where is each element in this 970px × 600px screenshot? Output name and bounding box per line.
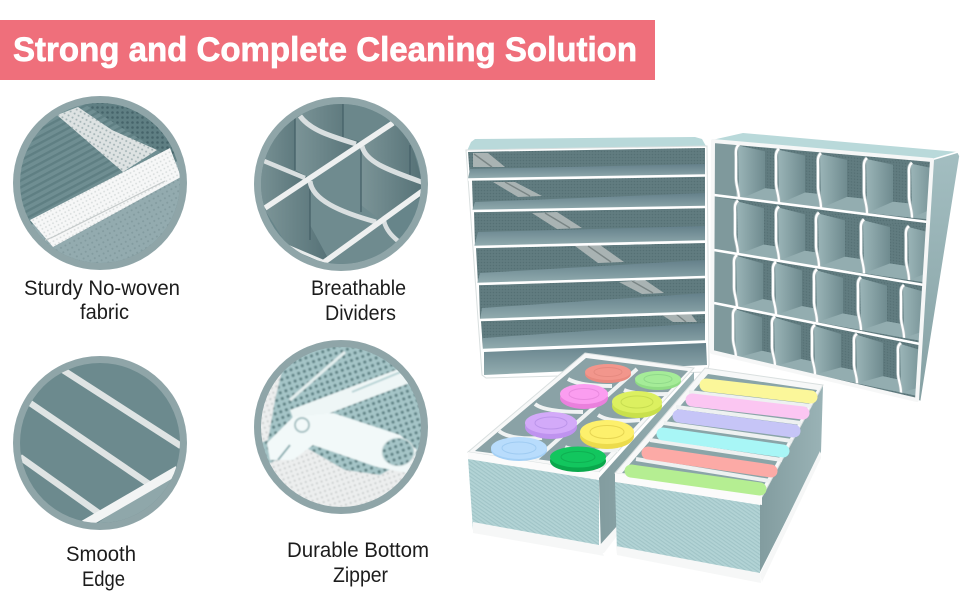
caption: zipper: Zipper xyxy=(333,564,388,587)
organizer: open panel with long shelves xyxy=(466,137,709,378)
row 1 cells xyxy=(712,142,938,220)
title banner xyxy=(0,20,655,80)
sock: lime xyxy=(612,391,662,418)
detail circle: breathable dividers xyxy=(254,97,428,275)
caption: smooth edge: Edge xyxy=(82,568,125,591)
sock: salmon xyxy=(585,364,631,383)
caption: breathable dividers: Breathable xyxy=(311,277,406,300)
drawer organizer with rolled socks xyxy=(468,353,694,556)
cell dividers xyxy=(499,369,668,460)
caption: breathable dividers: Dividers xyxy=(325,302,396,325)
shirt: yellow xyxy=(706,385,811,397)
rolled shirts xyxy=(631,385,811,489)
caption: sturdy fabric: Sturdy No-woven xyxy=(24,277,180,300)
shelf backs xyxy=(468,148,705,350)
row 4 cells xyxy=(714,304,918,396)
shirt: salmon xyxy=(648,453,771,471)
detail circle: smooth edge xyxy=(13,356,190,530)
side face xyxy=(917,152,960,402)
sock: yellow xyxy=(580,420,634,449)
caption: breathable dividers xyxy=(311,277,406,325)
rim and interior xyxy=(468,353,694,472)
drawer organizer with rolled shirts xyxy=(615,368,823,583)
white frame xyxy=(712,141,932,400)
shelf edges xyxy=(468,176,705,350)
shirt: lime xyxy=(631,471,760,489)
row edges xyxy=(714,195,928,344)
title text: Strong and Complete Cleaning Solution xyxy=(13,31,637,69)
caption: zipper: Durable Bottom xyxy=(287,539,429,562)
sock: green xyxy=(550,446,606,472)
top rim xyxy=(467,137,707,151)
caption: sturdy fabric xyxy=(24,277,180,324)
detail circle: sturdy fabric xyxy=(13,96,190,270)
shelf floors xyxy=(468,164,707,375)
side face xyxy=(760,385,823,572)
caption: smooth edge xyxy=(66,543,136,591)
caption: smooth edge: Smooth xyxy=(66,543,136,566)
sock: purple xyxy=(525,412,577,439)
strap seam xyxy=(474,154,686,322)
side face xyxy=(599,372,694,552)
row dividers xyxy=(636,392,811,481)
shirt: cyan xyxy=(663,434,783,451)
sock: light blue xyxy=(491,437,547,461)
detail circle: zipper xyxy=(254,340,428,515)
row 2 cells xyxy=(712,197,937,284)
diagonal strap xyxy=(473,153,697,322)
front face xyxy=(468,458,599,553)
sock: light green xyxy=(635,371,681,390)
organizer: open panel with small cells xyxy=(712,133,960,402)
rim and interior xyxy=(615,368,823,497)
row 3 cells xyxy=(714,252,922,340)
rolled socks xyxy=(491,364,681,472)
top face xyxy=(712,133,958,161)
caption: sturdy fabric: fabric xyxy=(80,301,129,324)
front face xyxy=(712,141,932,400)
shirt: lavender xyxy=(679,416,794,431)
sock: pink xyxy=(560,384,608,409)
caption: zipper xyxy=(287,539,429,587)
shirt: pink xyxy=(692,400,803,413)
front face xyxy=(615,482,760,580)
